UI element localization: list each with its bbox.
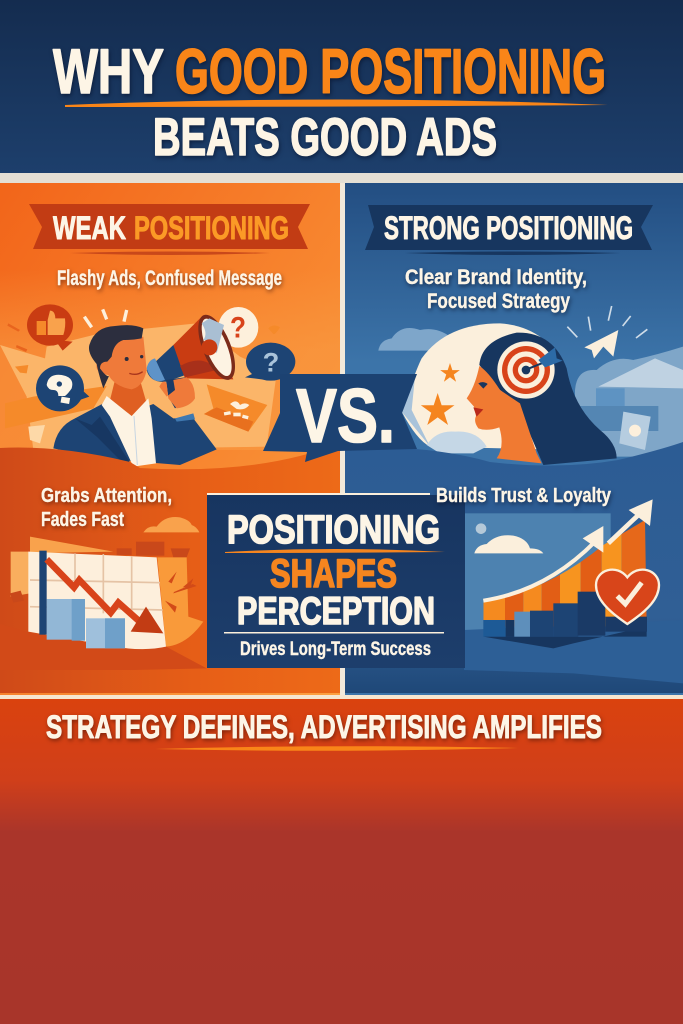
header band bbox=[0, 0, 683, 173]
illustration: man with megaphone bbox=[0, 304, 295, 467]
footer underline bbox=[155, 746, 518, 751]
footer background bbox=[0, 699, 683, 1024]
hair bbox=[89, 325, 143, 388]
heading: perception: PERCEPTION bbox=[237, 590, 435, 633]
hand bbox=[159, 377, 195, 408]
center box: positioning shapes perception bbox=[207, 493, 465, 668]
face bbox=[467, 366, 542, 463]
shirt bbox=[102, 396, 156, 467]
ribbon: strong positioning bbox=[365, 205, 653, 255]
heading: shapes: SHAPES bbox=[270, 552, 397, 596]
ribbon: weak positioning: POSITIONING bbox=[134, 210, 289, 246]
title line 1: WHY bbox=[53, 37, 164, 107]
chart: falling arrow bbox=[0, 517, 207, 670]
heading: positioning: POSITIONING bbox=[227, 508, 440, 552]
wave: lower right panel bbox=[345, 442, 683, 693]
tagline: Drives Long-Term Success bbox=[240, 639, 431, 660]
text: grabs attention bbox=[41, 485, 172, 531]
head bbox=[96, 337, 147, 389]
icon: thumbs up bubble bbox=[27, 304, 73, 351]
subtitle: clear brand identity bbox=[405, 266, 587, 313]
icon: heart with check bbox=[596, 570, 659, 624]
icon: question bubble blue right bbox=[245, 343, 295, 381]
suit bbox=[53, 403, 217, 465]
hair bbox=[479, 333, 617, 465]
subtitle: flashy ads: Flashy Ads, Confused Message bbox=[57, 267, 282, 290]
moon bbox=[402, 323, 573, 450]
subtitle: clear brand identity: Clear Brand Identity, bbox=[405, 266, 587, 289]
neck bbox=[110, 380, 147, 418]
stars bbox=[440, 363, 460, 382]
icon: envelope banner bbox=[204, 384, 267, 432]
title line 2: BEATS GOOD ADS bbox=[153, 108, 497, 167]
chart: rising arrows with heart bbox=[464, 499, 683, 683]
footer band bbox=[0, 695, 683, 751]
subtitle: clear brand identity: Focused Strategy bbox=[427, 290, 570, 313]
icon: question bubble white: ? bbox=[230, 311, 246, 344]
rays bbox=[84, 309, 127, 327]
target bbox=[497, 341, 563, 399]
illustration: woman with target bbox=[378, 306, 683, 465]
title underline bbox=[65, 100, 608, 107]
megaphone bbox=[147, 310, 243, 408]
title line 1 bbox=[53, 37, 606, 107]
panel: strong positioning bbox=[345, 183, 683, 695]
text: builds trust: Builds Trust & Loyalty bbox=[436, 485, 612, 507]
ribbon: weak positioning bbox=[29, 204, 310, 255]
icon: paper plane bbox=[567, 306, 647, 358]
vs ribbon: VS. bbox=[296, 374, 395, 459]
panel: weak positioning bbox=[0, 183, 340, 695]
vertical divider bbox=[340, 183, 345, 695]
icon: question bubble blue right: ? bbox=[263, 348, 279, 378]
wave: lower left panel bbox=[0, 443, 340, 693]
text: grabs attention: Fades Fast bbox=[41, 509, 124, 531]
cream divider band bbox=[0, 173, 683, 183]
text: grabs attention: Grabs Attention, bbox=[41, 485, 172, 507]
icon: question bubble blue left bbox=[36, 365, 89, 411]
icon: question bubble white bbox=[218, 307, 258, 348]
ribbon: weak positioning: WEAK bbox=[53, 210, 126, 246]
